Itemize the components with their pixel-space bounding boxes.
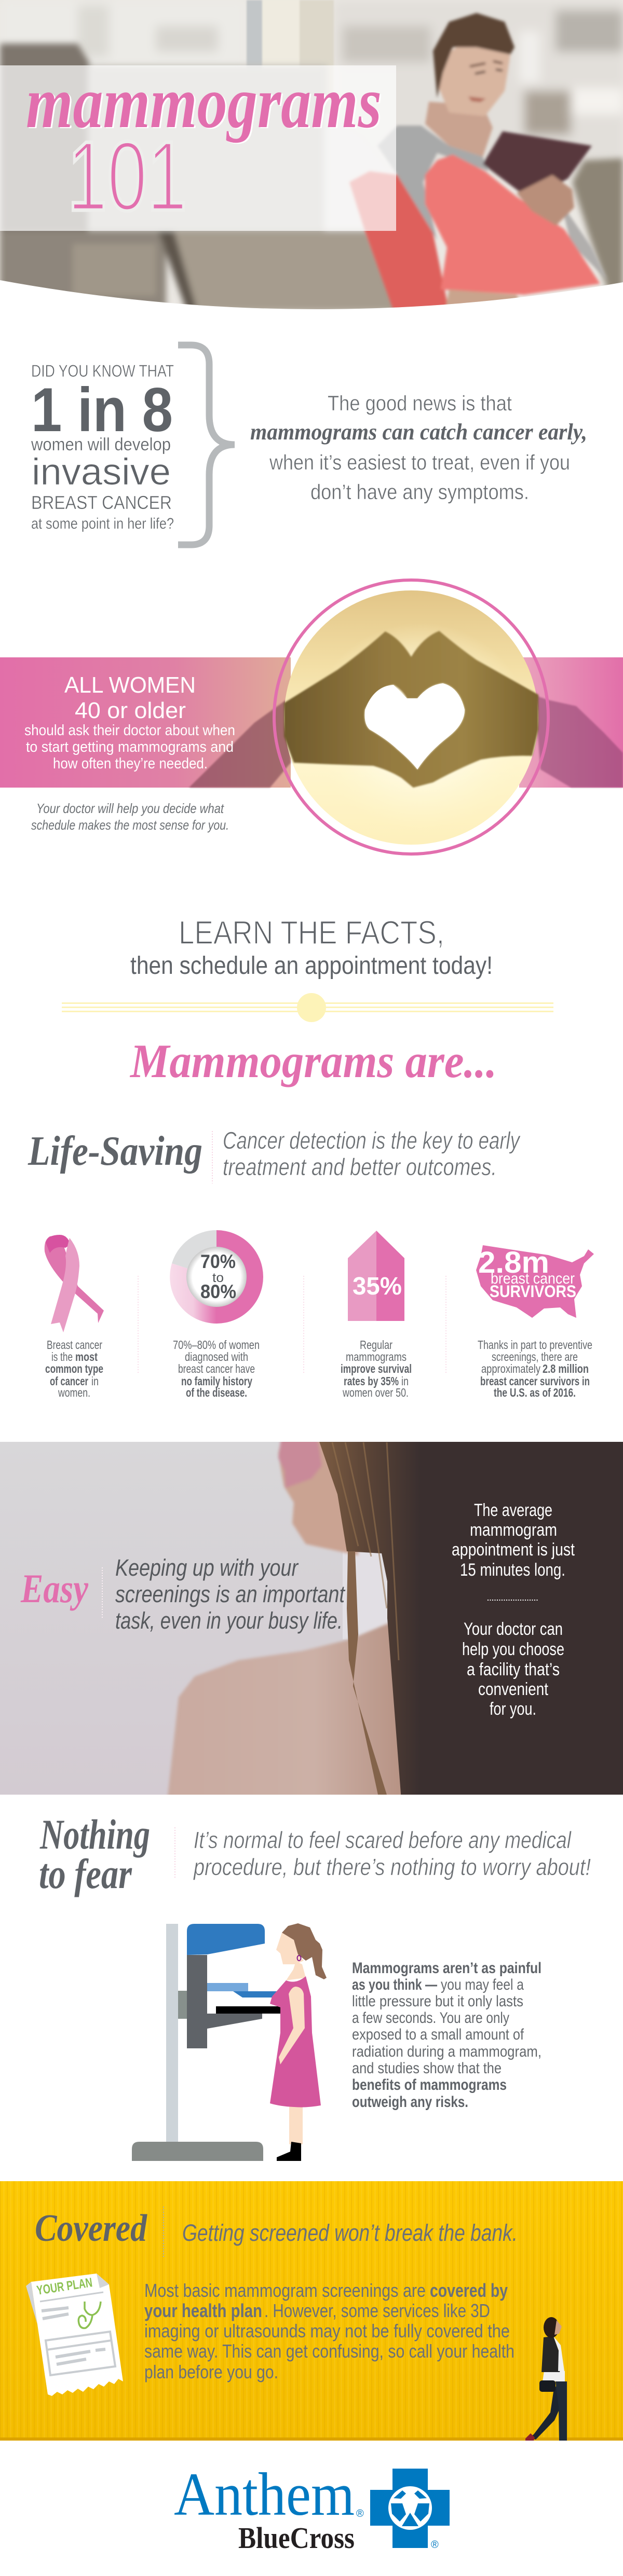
section header: easy: Keeping up with your [115, 1554, 299, 1581]
circle photo: hands making a heart against the sun [274, 580, 548, 854]
good news text: don’t have any symptoms. [310, 480, 529, 504]
donut chart: to [212, 1271, 224, 1285]
statistic: 1 in 8 [31, 362, 174, 532]
band text: all women 40 or older [24, 672, 235, 772]
statistic: 1 in 8: women will develop [31, 435, 171, 454]
text: covered by your health plan: covered by [430, 2280, 508, 2301]
title: mammograms: mammograms [28, 62, 383, 144]
stat column: survivors [476, 1245, 594, 1399]
icon: blue cross: ® [431, 2539, 439, 2551]
stat column: donut [170, 1230, 263, 1399]
ring [274, 580, 548, 854]
icon: blue cross [370, 2469, 450, 2551]
logo: Anthem BlueCross: Anthem [174, 2460, 355, 2528]
text: covered by your health plan: imaging or ultrasounds may not be fully covered the [144, 2320, 510, 2341]
note: your doctor will help [31, 801, 229, 833]
caption: of the disease. [186, 1386, 247, 1399]
text: mammograms aren't as painful: you may feel a [441, 1976, 524, 1993]
caption: Thanks in part to preventive [478, 1338, 592, 1352]
caption: most [75, 1350, 98, 1363]
band text: all women 40 or older: how often they’re needed. [53, 755, 208, 772]
logo: Anthem BlueCross: ® [356, 2508, 364, 2519]
stat column: ribbon [45, 1235, 104, 1399]
text: covered by your health plan: plan before you go. [144, 2361, 278, 2382]
right text on dark hair: Your doctor can [464, 1619, 563, 1639]
section header: covered: Getting screened won’t break the bank. [182, 2220, 518, 2246]
yellow corrugated panel [0, 2181, 623, 2441]
title: 101: 101 [67, 121, 187, 231]
caption: common type [45, 1362, 103, 1375]
icon: your plan paper [26, 2274, 123, 2396]
caption [173, 1338, 260, 1399]
text: covered by your health plan: same way. This can get confusing, so call your health [144, 2340, 514, 2362]
band text: all women 40 or older: 40 or older [75, 698, 186, 723]
illustration: mammogram machine [132, 1924, 280, 2161]
map of the U.S.: SURVIVORS [490, 1282, 576, 1301]
section header: nothing to fear: to fear [39, 1850, 132, 1897]
statistic: 1 in 8: at some point in her life? [31, 515, 174, 532]
caption: rates by 35% [344, 1374, 399, 1388]
section header: nothing to fear: Nothing [39, 1811, 150, 1858]
section header: easy [20, 1554, 346, 1634]
walking woman [525, 2317, 567, 2441]
caption: approximately [481, 1362, 540, 1375]
statistic: 1 in 8: BREAST CANCER [31, 492, 172, 513]
caption: of cancer [50, 1374, 88, 1388]
section header: life-saving: Cancer detection is the key to early [223, 1127, 521, 1154]
caption [45, 1338, 103, 1399]
text: covered by your health plan [144, 2280, 514, 2382]
heading: learn the facts [130, 915, 493, 980]
title panel [0, 61, 396, 231]
good news text [250, 391, 587, 504]
photo: woman's neck and shoulder with long hair [0, 1437, 623, 1806]
caption: no family history [181, 1374, 252, 1388]
section header: easy: screenings is an important [115, 1581, 346, 1607]
hands silhouette [284, 631, 538, 788]
right text on dark hair: appointment is just [452, 1540, 575, 1560]
illustration: woman standing [270, 1923, 327, 2161]
map of the U.S.: 2.8m [478, 1246, 549, 1279]
statistic: 1 in 8: 1 in 8 [31, 375, 173, 445]
good news text: The good news is that [328, 391, 512, 415]
woman [349, 13, 607, 311]
right text on dark hair: a facility that’s [467, 1660, 560, 1679]
text: covered by your health plan: . However, some services like 3D [264, 2300, 490, 2321]
text: mammograms aren't as painful: as you think — [352, 1976, 437, 1993]
text: mammograms aren't as painful [352, 1960, 541, 2111]
text: covered by your health plan: Most basic mammogram screenings are [144, 2280, 426, 2301]
caption: improve survival [341, 1362, 412, 1375]
good news text: when it’s easiest to treat, even if you [269, 450, 570, 474]
statistic: 1 in 8: invasive [32, 451, 171, 493]
donut chart: 80% [200, 1281, 236, 1302]
text: covered by your health plan: your health plan [144, 2300, 262, 2321]
right forearm [535, 695, 623, 788]
column dividers [138, 1276, 446, 1373]
map of the U.S.: breast cancer [491, 1270, 575, 1287]
text: mammograms aren't as painful: Mammograms aren’t as painful [352, 1960, 541, 1977]
text: mammograms aren't as painful: radiation during a mammogram, [352, 2043, 541, 2060]
heading: mammograms are: Mammograms are... [129, 1035, 497, 1087]
section header: life-saving: Life-Saving [28, 1128, 202, 1174]
right text on dark hair: help you choose [462, 1640, 564, 1659]
text: mammograms aren't as painful: little pressure but it only lasts [352, 1993, 523, 2010]
caption: Regular [360, 1338, 392, 1352]
caption: 2.8 million [543, 1362, 589, 1375]
band text: all women 40 or older: ALL WOMEN [64, 672, 196, 698]
map of the U.S. [476, 1245, 594, 1318]
icon: stethoscope [78, 2302, 101, 2328]
yellow divider [62, 993, 553, 1022]
window background [79, 2, 623, 158]
text: mammograms aren't as painful: a few seconds. You are only [352, 2009, 509, 2027]
band text: all women 40 or older: should ask their doctor about when [24, 722, 235, 739]
section header: nothing to fear [39, 1811, 591, 1897]
caption [341, 1338, 412, 1399]
heading: learn the facts: then schedule an appointment today! [130, 952, 493, 980]
icon: curly brace [178, 345, 235, 545]
section header: easy: task, even in your busy life. [115, 1607, 343, 1634]
section header: life-saving: treatment and better outcomes. [223, 1153, 497, 1180]
sofa [0, 44, 623, 314]
icon: pink ribbon [45, 1235, 104, 1332]
caption: mammograms [346, 1350, 407, 1363]
section header: covered: Covered [35, 2207, 147, 2250]
icon: up arrow [348, 1231, 404, 1321]
text: mammograms aren't as painful: exposed to a small amount of [352, 2026, 524, 2043]
note: your doctor will help: schedule makes the most sense for you. [31, 817, 229, 833]
right text on dark hair [452, 1500, 575, 1719]
icon: your plan paper: YOUR PLAN [36, 2275, 93, 2298]
caption: Breast cancer [47, 1338, 102, 1352]
right text on dark hair: The average [474, 1500, 552, 1520]
section header: life-saving [28, 1127, 521, 1183]
caption: is the [51, 1350, 73, 1363]
right text on dark hair: mammogram [470, 1520, 557, 1540]
hero photo: woman with tablet on sofa [0, 0, 623, 314]
caption: women. [58, 1386, 90, 1399]
caption: the U.S. as of 2016. [494, 1386, 576, 1399]
caption: in [91, 1374, 99, 1388]
band text: all women 40 or older: to start getting mammograms and [26, 739, 234, 755]
statistic: 1 in 8: DID YOU KNOW THAT [31, 362, 174, 380]
caption: diagnosed with [185, 1350, 248, 1363]
note: your doctor will help: Your doctor will help you decide what [36, 801, 224, 816]
logo: Anthem BlueCross [174, 2460, 450, 2555]
window frame [246, 0, 334, 65]
donut chart: 70% [200, 1251, 236, 1272]
right text on dark hair: 15 minutes long. [460, 1560, 565, 1580]
right text on dark hair: for you. [490, 1699, 536, 1719]
pink band [0, 657, 623, 788]
title: mammograms: mammograms [26, 61, 382, 143]
stat column: arrow 35% [341, 1231, 412, 1399]
right text on dark hair: convenient [478, 1679, 548, 1699]
caption [478, 1338, 592, 1399]
section header: easy: Easy [20, 1566, 88, 1611]
text: mammograms aren't as painful: outweigh any risks. [352, 2093, 468, 2111]
caption: women over 50. [342, 1386, 409, 1399]
hair [318, 1437, 623, 1800]
logo: Anthem BlueCross: BlueCross [238, 2521, 355, 2555]
left forearm [189, 700, 291, 788]
text: mammograms aren't as painful: and studies show that the [352, 2060, 502, 2077]
caption: 70%–80% of women [173, 1338, 260, 1352]
donut chart [170, 1230, 263, 1324]
skin [167, 1437, 413, 1806]
section header: covered [35, 2207, 518, 2258]
caption: screenings, there are [492, 1350, 578, 1363]
text: mammograms aren't as painful: benefits of mammograms [352, 2076, 507, 2093]
heading: learn the facts: LEARN THE FACTS, [179, 915, 444, 951]
icon: up arrow: 35% [353, 1273, 402, 1300]
caption: in [401, 1374, 409, 1388]
caption: breast cancer have [178, 1362, 255, 1375]
good news text: mammograms can catch cancer early, [250, 419, 587, 445]
